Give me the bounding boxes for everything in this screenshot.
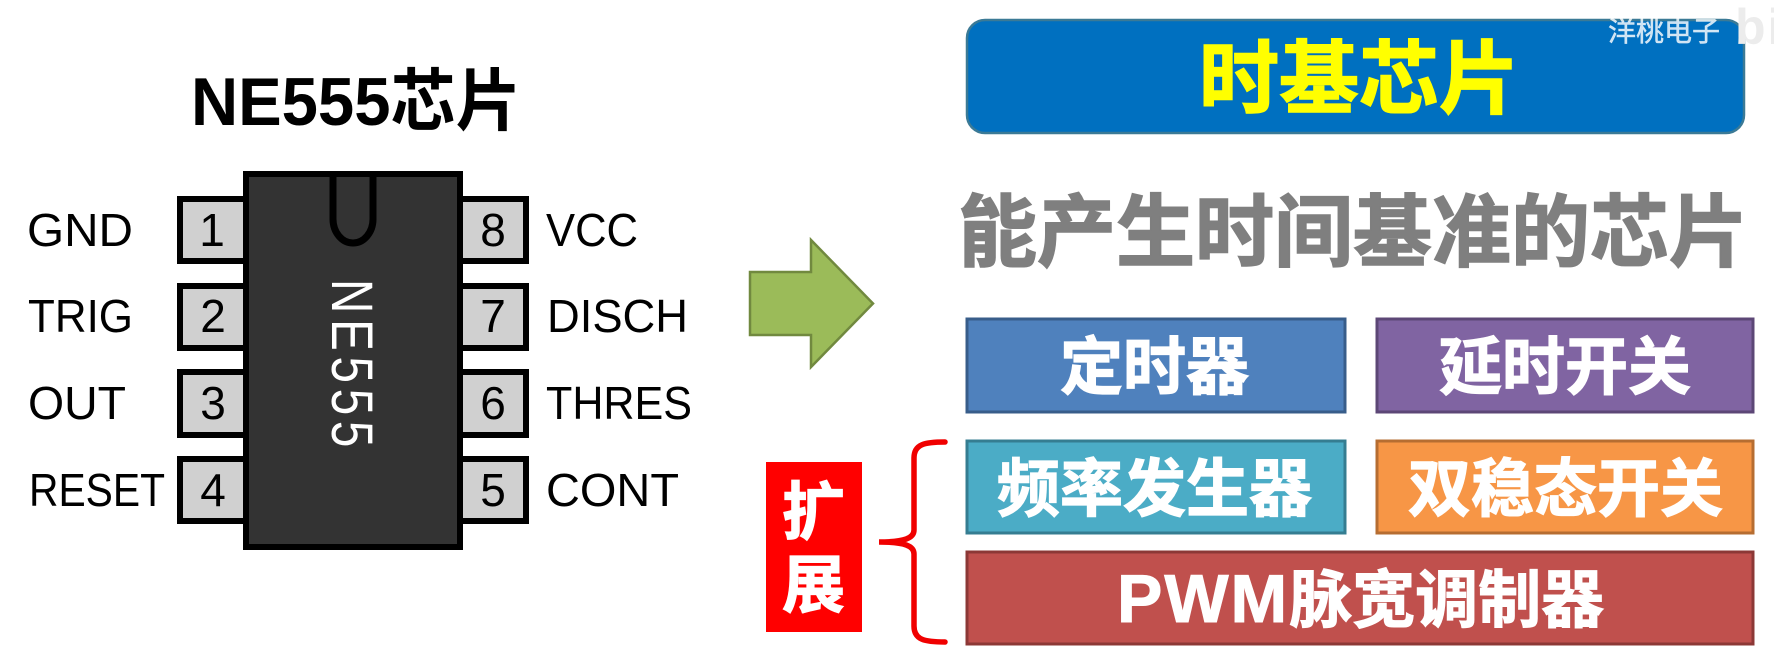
pin labels [27, 204, 692, 516]
left pin 3: 3 [200, 377, 226, 429]
pin labels: VCC [546, 204, 638, 256]
left pin 4: 4 [200, 464, 226, 516]
box: 定时器: 定时器 [1060, 317, 1249, 408]
pin labels: CONT [546, 464, 679, 516]
arrow [750, 240, 873, 367]
pin labels: DISCH [547, 290, 688, 342]
pin labels: OUT [28, 377, 126, 429]
left pin 1 [180, 199, 246, 261]
pin labels: RESET [29, 464, 165, 516]
box: 延时开关: 延时开关 [1439, 317, 1691, 408]
right pin 5: 5 [480, 464, 506, 516]
left pin 4 [180, 459, 246, 521]
right pin 8: 8 [480, 204, 506, 256]
panel: NE555 chip diagram [180, 174, 526, 547]
right pin 6: 6 [480, 377, 506, 429]
right pin 5 [460, 459, 526, 521]
left pin 2: 2 [200, 290, 226, 342]
chip notch [333, 177, 373, 243]
left pin 1: 1 [199, 204, 225, 256]
box: PWM脉宽调制器: PWM脉宽调制器 [1117, 550, 1604, 641]
box: 延时开关 [1377, 317, 1753, 412]
title banner: 时基芯片: 时基芯片 [1199, 15, 1519, 131]
right pin 7 [460, 286, 526, 348]
box: PWM脉宽调制器 [967, 550, 1753, 644]
chip marking NE555: NE555 [319, 279, 383, 453]
box: 双稳态开关: 双稳态开关 [1408, 439, 1723, 530]
right pin 8 [460, 199, 526, 261]
box: 定时器 [967, 317, 1345, 412]
pin labels: TRIG [28, 290, 133, 342]
box: 频率发生器: 频率发生器 [997, 439, 1312, 530]
right pin 7: 7 [480, 290, 506, 342]
pin labels: THRES [546, 377, 692, 429]
pin labels: GND [27, 204, 133, 256]
chip title: NE555芯片 [191, 46, 521, 145]
extension label: 扩展 [766, 462, 862, 632]
title banner: 时基芯片 [967, 15, 1744, 133]
right pin 6 [460, 372, 526, 435]
chip body [246, 174, 460, 547]
definition text: 能产生时间基准的芯片 [958, 168, 1748, 283]
left pin 2 [180, 286, 246, 348]
extension label: 扩展: 扩 [782, 462, 845, 553]
brace [879, 442, 945, 642]
left pin 3 [180, 372, 246, 435]
watermark: 洋桃电子: 洋桃电子 [1608, 10, 1720, 50]
extension label: 扩展: 展 [782, 535, 845, 626]
